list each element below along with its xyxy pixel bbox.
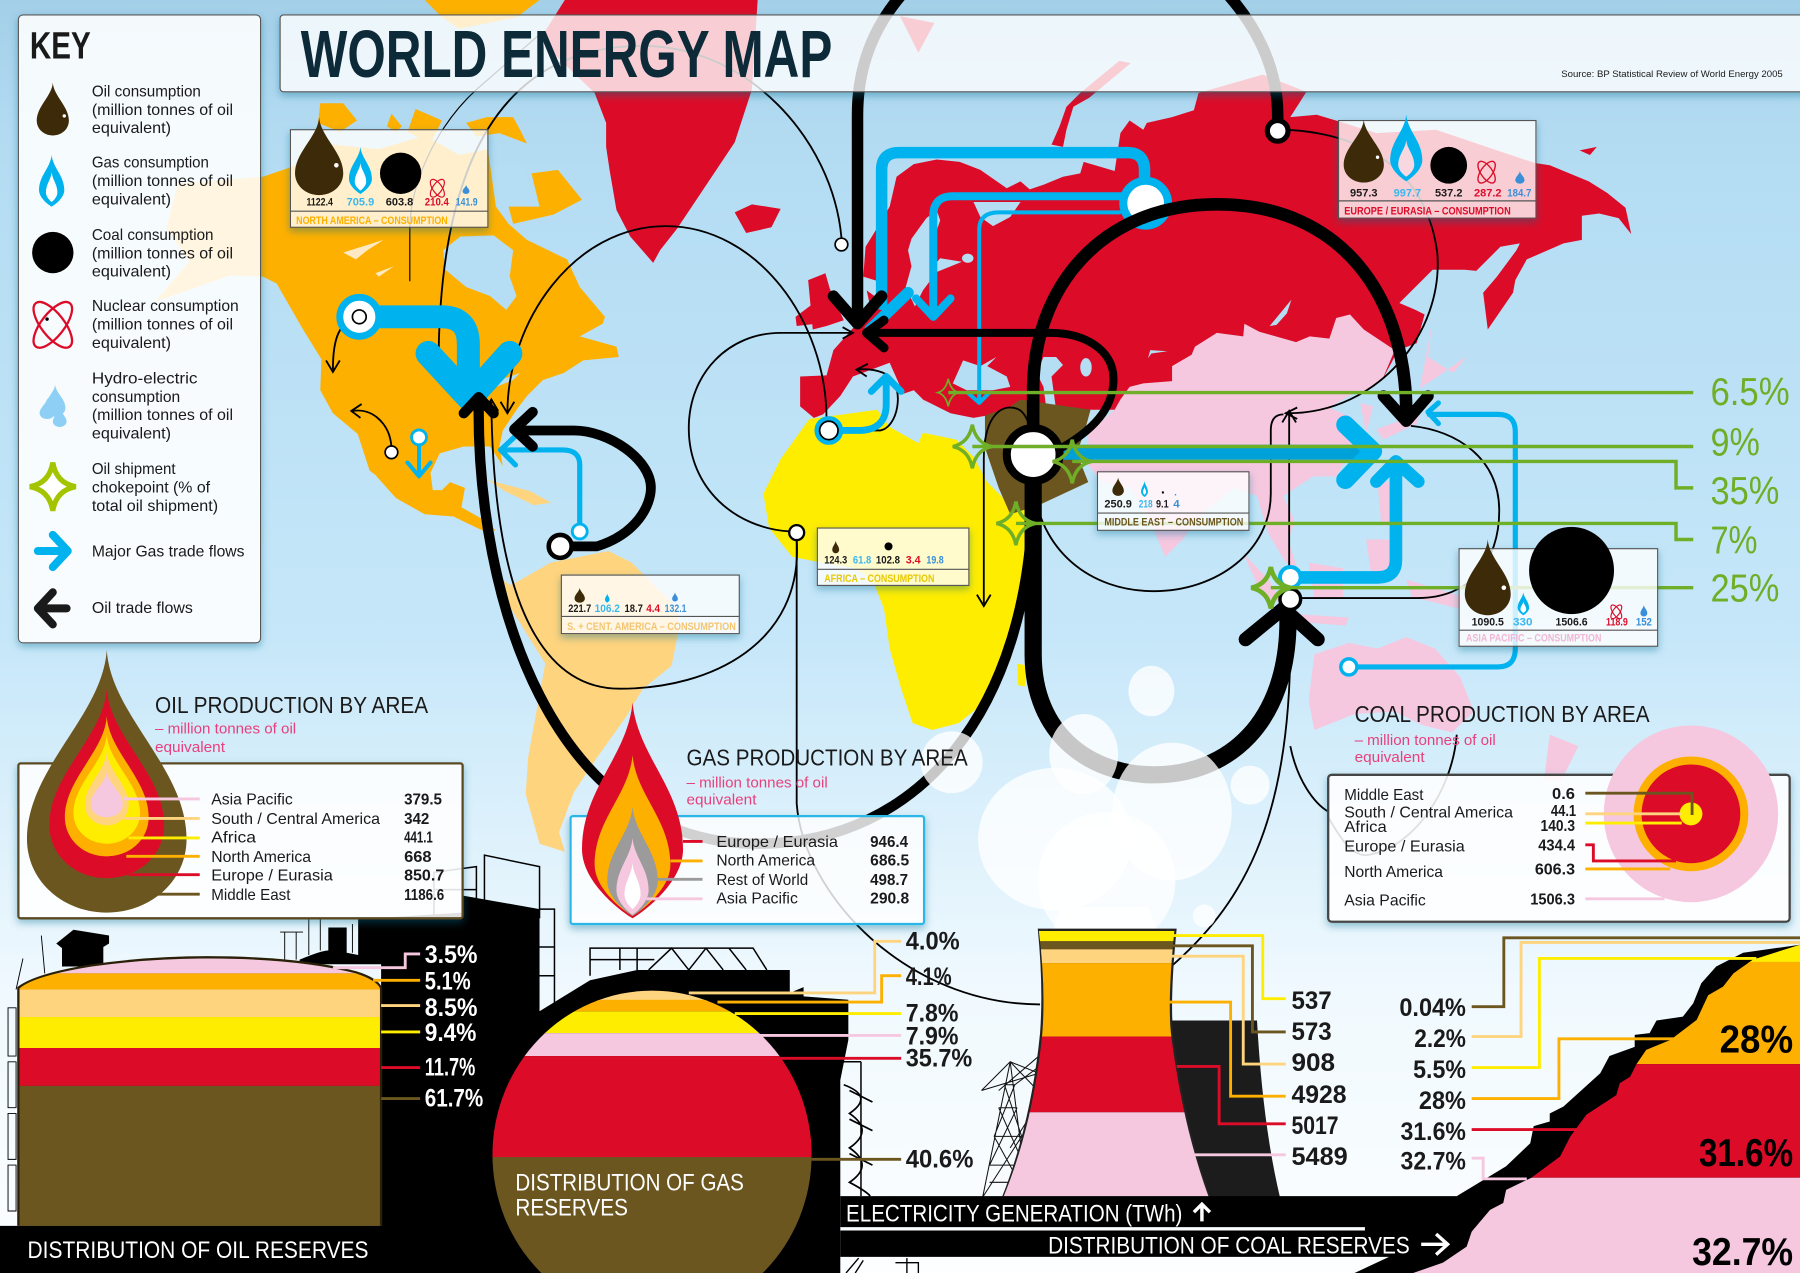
values: 3.4 <box>906 555 921 567</box>
panel: South and Central America consumption <box>561 575 739 634</box>
nested coal circles <box>1604 725 1778 902</box>
legend values: 140.3 <box>1541 818 1575 835</box>
map: North America <box>155 0 619 530</box>
values: 106.2 <box>595 603 620 615</box>
text: oil consumption <box>92 83 233 137</box>
values <box>1350 187 1531 199</box>
chokepoint percentages: 25% <box>1710 567 1779 610</box>
large percentages: 28% <box>1720 1019 1793 1062</box>
legend values: 379.5 <box>404 792 442 809</box>
map: Greenland and Iceland <box>540 0 781 263</box>
panel: North America consumption <box>290 117 488 227</box>
legend labels: Rest of World <box>716 872 808 889</box>
icon: gas arrow <box>38 535 68 567</box>
sub heading <box>155 720 296 756</box>
values: 4928 <box>1291 1081 1347 1109</box>
icon: gas flame <box>39 155 64 207</box>
legend labels: Europe / Eurasia <box>211 867 333 884</box>
leader lines <box>1169 936 1286 1155</box>
legend values: 498.7 <box>870 872 908 889</box>
text: nuclear consumption: equivalent) <box>92 335 171 352</box>
legend labels: North America <box>1344 864 1443 881</box>
label: RESERVES <box>515 1195 628 1222</box>
panel: key: KEY <box>30 26 91 68</box>
text: hydro consumption: equivalent) <box>92 425 171 442</box>
spiral stair <box>844 1085 872 1196</box>
bottom silhouettes: refinery <box>0 855 872 1273</box>
values: 5017 <box>1291 1112 1339 1140</box>
values: 705.9 <box>347 196 374 208</box>
values: 1090.5 <box>1472 617 1504 629</box>
legend values <box>870 834 910 907</box>
chart: oil reserves tank <box>0 941 483 1226</box>
values: 5489 <box>1291 1143 1348 1171</box>
nested oil drops <box>27 650 187 913</box>
text: chokepoint: chokepoint (% of <box>92 479 211 496</box>
legend labels <box>716 834 838 907</box>
values: 287.2 <box>1474 187 1502 199</box>
icon: chokepoint star <box>30 463 76 511</box>
values <box>1291 987 1348 1171</box>
values <box>1104 498 1180 510</box>
panel: Middle East consumption <box>1097 472 1249 530</box>
icons <box>1112 478 1176 497</box>
percentages <box>1399 994 1466 1176</box>
chart: coal reserves heap <box>840 936 1800 1273</box>
text: gas consumption: Gas consumption <box>92 155 209 172</box>
values: 1506.6 <box>1555 617 1588 629</box>
chokepoint percentages: 9% <box>1710 422 1760 465</box>
map: Europe and Russia <box>796 16 1631 418</box>
icons <box>1344 115 1524 186</box>
text: gas consumption: equivalent) <box>92 191 171 208</box>
sub heading: – million tonnes of oil <box>155 720 296 737</box>
map: South America and Caribbean <box>488 480 677 852</box>
legend labels: Africa <box>1344 819 1387 836</box>
percentages: 8.5% <box>425 994 478 1022</box>
panel: Middle East consumption: MIDDLE EAST – CONSUMPTION <box>1104 517 1243 529</box>
legend values: 342 <box>404 811 429 828</box>
thin flow lines <box>326 34 1499 1004</box>
legend labels: Asia Pacific <box>716 890 798 907</box>
percentages: 3.5% <box>425 941 478 969</box>
oil flows <box>464 0 1318 844</box>
legend values: 850.7 <box>404 867 444 884</box>
panel: Asia Pacific consumption: ASIA PACIFIC – CONSUMPTION <box>1466 633 1601 645</box>
label: DISTRIBUTION OF GAS <box>515 1169 744 1196</box>
text: chokepoint: Oil shipment <box>92 461 176 478</box>
illustration: lower pylon fragments <box>846 1258 918 1273</box>
legend lines <box>646 841 703 899</box>
text: nuclear consumption <box>92 298 239 352</box>
legend labels: North America <box>716 853 815 870</box>
shipment chokepoint lines <box>948 393 1693 588</box>
values: 61.8 <box>853 555 872 567</box>
values: 18.7 <box>624 603 643 615</box>
map: inland seas <box>906 202 1291 413</box>
legend labels: Europe / Eurasia <box>716 834 838 851</box>
map: Asia Pacific <box>1088 315 1578 781</box>
chart: gas reserves sphere <box>482 927 973 1273</box>
text: coal consumption: equivalent) <box>92 264 171 281</box>
panel: gas production <box>571 703 968 924</box>
percentages: 31.6% <box>1401 1118 1466 1146</box>
legend values: 606.3 <box>1535 862 1575 879</box>
percentages <box>425 941 483 1113</box>
legend values: 1506.3 <box>1530 892 1575 909</box>
values: 1122.4 <box>307 196 333 208</box>
values: 573 <box>1291 1018 1332 1046</box>
panel: title: WORLD ENERGY MAP <box>301 18 832 92</box>
icon: hydro drops <box>40 385 67 427</box>
panel: Africa consumption: AFRICA – CONSUMPTION <box>824 573 934 585</box>
icons <box>1465 527 1647 620</box>
sub heading: – million tonnes of oil <box>1355 732 1496 749</box>
steam clouds <box>921 666 1270 949</box>
values: 330 <box>1513 617 1533 629</box>
panel: title: Source: BP Statistical Review of World Energy 2005 <box>1561 69 1783 79</box>
values: 102.8 <box>876 555 901 567</box>
values: 19.8 <box>926 555 944 567</box>
icons <box>295 117 470 199</box>
legend labels: South / Central America <box>1344 804 1513 821</box>
legend values <box>1530 786 1576 909</box>
values <box>824 555 944 567</box>
percentages: 5.5% <box>1413 1056 1466 1084</box>
percentages: 5.1% <box>425 967 471 995</box>
sub heading: – million tonnes of oil <box>686 774 828 791</box>
legend labels: South / Central America <box>211 811 380 828</box>
legend values: 686.5 <box>870 853 910 870</box>
percentages: 35.7% <box>906 1044 972 1072</box>
chart: electricity generation tower <box>999 929 1348 1200</box>
chokepoint percentages: 35% <box>1710 470 1779 513</box>
panel: North America consumption: NORTH AMERICA – CONSUMPTION <box>296 215 448 227</box>
leader lines <box>333 954 420 1099</box>
values: 184.7 <box>1507 187 1531 199</box>
sub heading: equivalent <box>155 739 226 756</box>
legend values: 290.8 <box>870 890 910 907</box>
icon: nuclear <box>27 296 79 354</box>
values: 141.9 <box>456 196 478 208</box>
values: 124.3 <box>824 555 847 567</box>
legend labels: Middle East <box>1344 787 1424 804</box>
percentages: 40.6% <box>906 1145 973 1173</box>
text: chokepoint: total oil shipment) <box>92 498 218 515</box>
text: hydro consumption: Hydro-electric <box>92 370 198 387</box>
heading: COAL PRODUCTION BY AREA <box>1355 701 1650 727</box>
values: 537 <box>1291 987 1332 1015</box>
chokepoint stars <box>938 379 1290 608</box>
icon: oil drop <box>37 83 69 135</box>
nested flames <box>582 703 683 918</box>
sub heading: equivalent <box>1355 749 1425 766</box>
values: 537.2 <box>1435 187 1462 199</box>
legend lines <box>1585 793 1692 899</box>
legend values <box>404 792 445 904</box>
percentages: 7.8% <box>906 1000 959 1028</box>
values: 4.4 <box>646 603 661 615</box>
map: lakes <box>443 165 536 388</box>
sub heading: equivalent <box>686 792 757 809</box>
legend labels: Asia Pacific <box>1344 893 1426 910</box>
legend values: 441.1 <box>404 830 433 847</box>
values: 4 <box>1173 498 1180 510</box>
values: 9.1 <box>1156 498 1169 510</box>
legend values: 0.6 <box>1552 786 1575 803</box>
map: northern lakes light <box>343 240 394 277</box>
panel: South and Central America consumption: S. + CENT. AMERICA – CONSUMPTION <box>567 621 736 633</box>
values: 152 <box>1636 617 1652 629</box>
text: oil consumption: Oil consumption <box>92 83 201 100</box>
legend values: 946.4 <box>870 834 908 851</box>
panel: title <box>280 15 1800 92</box>
legend labels: Middle East <box>211 887 291 904</box>
icon: coal <box>32 232 73 273</box>
illustration: pylon <box>982 1056 1039 1197</box>
text: gas trade: Major Gas trade flows <box>92 544 245 561</box>
text: gas consumption <box>92 155 233 208</box>
text: hydro consumption: consumption <box>92 389 180 406</box>
title: distribution of coal reserves: DISTRIBUTION OF COAL RESERVES <box>1048 1232 1410 1259</box>
percentages: 9.4% <box>425 1019 476 1047</box>
text: hydro consumption: (million tonnes of oil <box>92 407 233 424</box>
values: 132.1 <box>665 603 687 615</box>
values <box>568 603 687 615</box>
map: Middle East <box>985 399 1091 514</box>
percentages: 32.7% <box>1401 1148 1466 1176</box>
panel: Europe consumption <box>1339 115 1536 218</box>
legend values: 44.1 <box>1551 803 1576 820</box>
percentages: 28% <box>1419 1087 1466 1115</box>
values: 957.3 <box>1350 187 1378 199</box>
values <box>1472 617 1652 629</box>
heading: GAS PRODUCTION BY AREA <box>686 745 968 771</box>
legend labels <box>211 792 380 904</box>
percentages: 11.7% <box>425 1054 475 1082</box>
chokepoint percentages <box>1710 371 1790 610</box>
percentages: 2.2% <box>1414 1025 1466 1053</box>
text: hydro consumption <box>92 370 233 442</box>
text: nuclear consumption: (million tonnes of oil <box>92 316 233 333</box>
map: world regions <box>155 0 1631 852</box>
text: oil trade: Oil trade flows <box>92 600 193 617</box>
panel: oil production <box>18 650 463 918</box>
panel: Asia Pacific consumption <box>1459 527 1658 646</box>
label <box>515 1169 744 1222</box>
values: 118.9 <box>1606 617 1628 629</box>
flow nodes <box>340 121 1428 675</box>
percentages: 4.0% <box>906 927 960 955</box>
sub heading <box>686 774 828 809</box>
text: oil consumption: (million tonnes of oil <box>92 102 233 119</box>
percentages: 4.1% <box>906 963 952 991</box>
legend values: 1186.6 <box>404 887 445 904</box>
icons <box>575 588 678 603</box>
text: coal consumption: (million tonnes of oil <box>92 245 233 262</box>
values: 997.7 <box>1394 187 1421 199</box>
values <box>307 196 478 208</box>
legend values: 668 <box>404 849 432 866</box>
text: oil consumption: equivalent) <box>92 120 171 137</box>
gas flows <box>359 153 1515 667</box>
values: 210.4 <box>425 196 449 208</box>
legend labels <box>1344 787 1513 910</box>
legend labels: Europe / Eurasia <box>1344 839 1465 856</box>
chokepoint percentages: 7% <box>1710 519 1758 562</box>
panel: Europe consumption: EUROPE / EURASIA – CONSUMPTION <box>1344 206 1511 218</box>
text: gas consumption: (million tonnes of oil <box>92 173 233 190</box>
percentages: 61.7% <box>425 1085 483 1113</box>
panel: Africa consumption <box>817 528 969 585</box>
legend lines <box>124 799 200 894</box>
legend labels: North America <box>211 849 311 866</box>
text: coal consumption <box>92 227 233 281</box>
chokepoint percentages: 6.5% <box>1710 371 1790 414</box>
panel: key <box>18 15 261 643</box>
values: 908 <box>1291 1049 1335 1077</box>
values: 603.8 <box>386 196 414 208</box>
text: coal consumption: Coal consumption <box>92 227 214 244</box>
title: electricity generation: ELECTRICITY GENERATION (TWh) <box>846 1200 1182 1227</box>
icon: oil arrow <box>38 592 67 624</box>
text: chokepoint <box>92 461 218 515</box>
sub heading <box>1355 732 1496 766</box>
icons <box>832 541 893 553</box>
text: nuclear consumption: Nuclear consumption <box>92 298 239 315</box>
map: Africa <box>763 410 1039 730</box>
percentages: 7.9% <box>906 1023 959 1051</box>
percentages <box>906 927 973 1173</box>
leader lines <box>689 941 901 1159</box>
values: 218 <box>1139 498 1153 510</box>
values: 221.7 <box>568 603 591 615</box>
leader lines <box>1472 938 1800 1179</box>
title: distribution of oil reserves: DISTRIBUTION OF OIL RESERVES <box>28 1237 368 1264</box>
legend labels: Africa <box>211 830 256 847</box>
large percentages <box>1692 1019 1793 1273</box>
values: 250.9 <box>1104 498 1132 510</box>
legend labels: Asia Pacific <box>211 792 293 809</box>
heading: OIL PRODUCTION BY AREA <box>155 692 429 718</box>
percentages: 0.04% <box>1399 994 1466 1022</box>
panel: coal production <box>1328 701 1790 922</box>
legend values: 434.4 <box>1538 838 1575 855</box>
